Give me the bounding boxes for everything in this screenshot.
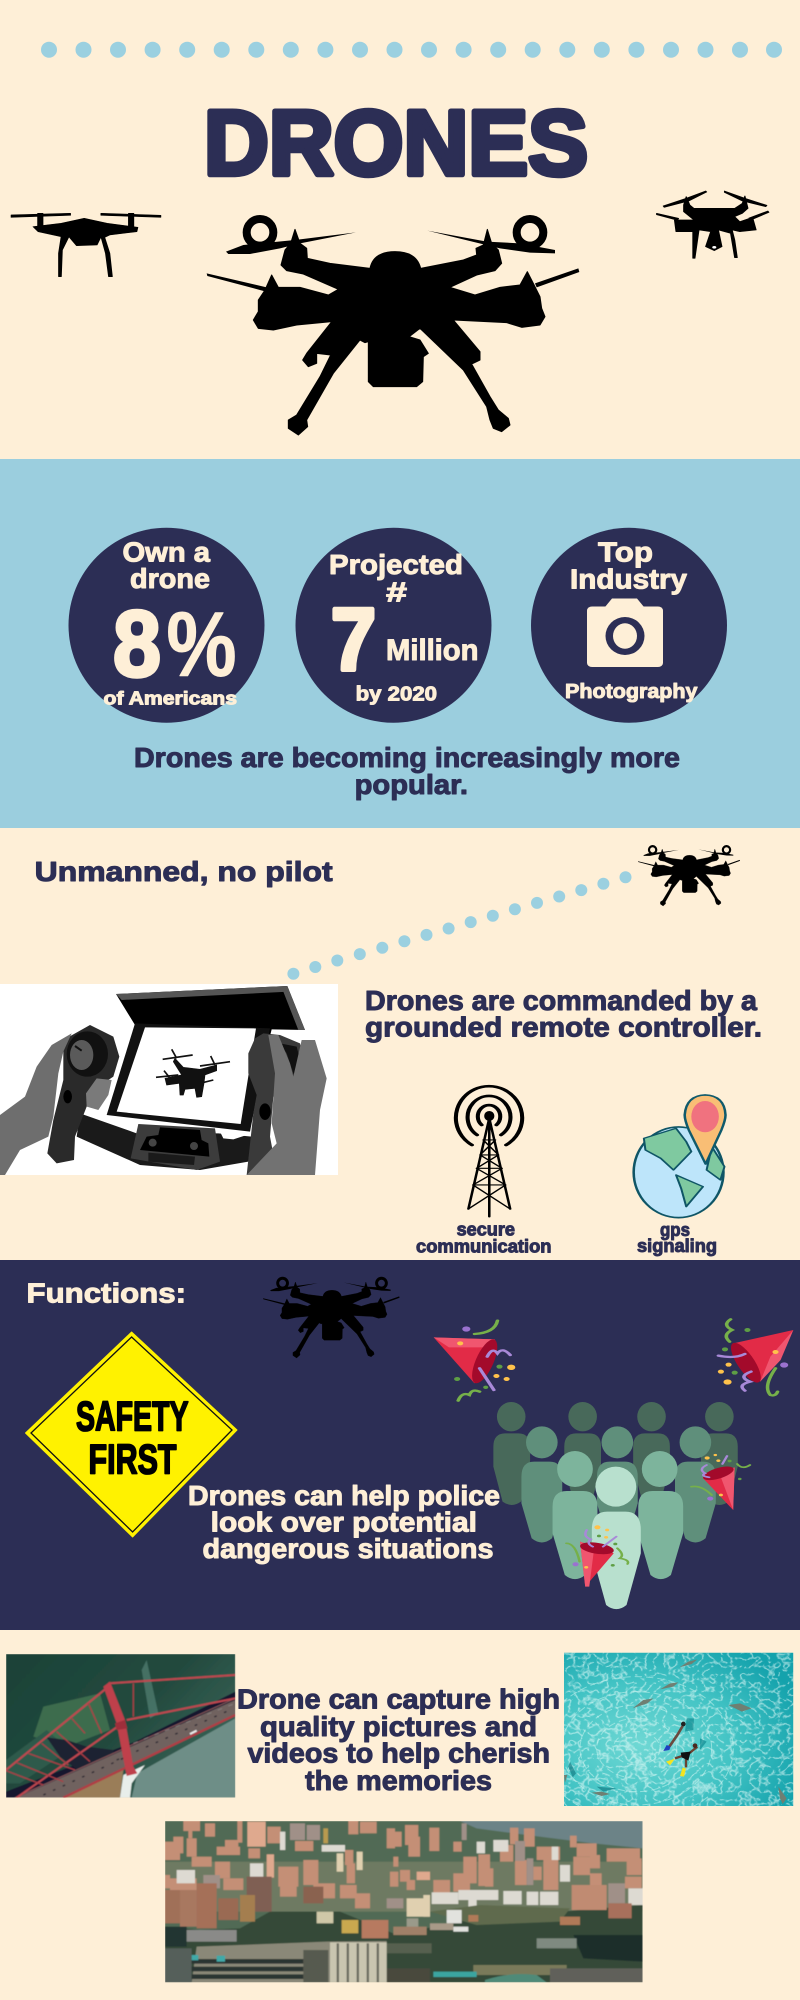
panel: functions (0, 1260, 800, 1630)
stat circle: top industry photography: Photography (565, 681, 698, 703)
stat circle: projected 7 million by 2020: by 2020 (356, 684, 437, 706)
panel: statistics (0, 459, 800, 828)
stat circle: projected 7 million by 2020: 7 (331, 590, 376, 689)
text: capture memories: the memories (305, 1765, 492, 1796)
stat circle: projected 7 million by 2020: # (386, 577, 408, 608)
icon: safety first sign: FIRST (88, 1436, 177, 1482)
stat circle: projected 7 million by 2020: Million (386, 634, 478, 667)
icon: party popper top right (718, 1319, 793, 1395)
text: commanded by remote controller: grounded remote controller. (365, 1012, 762, 1043)
label: gps signaling: gps (660, 1219, 690, 1240)
label: gps signaling: signaling (637, 1235, 717, 1256)
text: police situations: dangerous situations (202, 1533, 494, 1564)
text: police situations: Drones can help police (188, 1480, 500, 1511)
heading: functions: Functions: (26, 1278, 186, 1309)
stat circle: top industry photography: Industry (570, 563, 687, 594)
caption: drones popularity: popular. (355, 769, 468, 800)
icon: safety first sign (26, 1332, 237, 1537)
icon: crowd of people (493, 1402, 738, 1609)
icon: radio tower (456, 1086, 522, 1217)
icon: globe with gps pin (634, 1095, 726, 1218)
icon: party popper top left (434, 1321, 515, 1401)
text: capture memories (237, 1683, 560, 1796)
text: capture memories: Drone can capture high (237, 1683, 560, 1714)
photo: city skyline (165, 1821, 643, 1982)
icon: small drone right (657, 191, 769, 258)
stat circle: top industry photography (531, 528, 727, 723)
text: commanded by remote controller: Drones are commanded by a (365, 985, 757, 1016)
icon: camera (587, 598, 663, 667)
label: secure communication: communication (416, 1236, 552, 1257)
stat circle: 8 percent own a drone: drone (130, 563, 210, 594)
stat circle: projected 7 million by 2020: Projected (329, 549, 463, 580)
label: secure communication (416, 1219, 552, 1257)
icon: small drone left (11, 213, 161, 277)
image: remote controller with hands (0, 984, 338, 1175)
label: gps signaling (637, 1219, 717, 1256)
arrow: dotted signal line (287, 871, 632, 980)
stat circle: projected 7 million by 2020 (296, 528, 492, 723)
caption: drones popularity (134, 742, 680, 800)
dotted line: top decoration (41, 42, 782, 58)
stat circle: top industry photography: Top (598, 537, 653, 568)
title: DRONES (204, 92, 588, 194)
stat circle: 8 percent own a drone: Own a (122, 537, 211, 568)
icon: safety first sign: SAFETY (76, 1392, 188, 1440)
text: commanded by remote controller (365, 985, 762, 1043)
icon: party popper centre (566, 1525, 628, 1587)
text: police situations: look over potential (211, 1507, 477, 1538)
photo: swimmers and sharks in turquoise sea (564, 1652, 794, 1806)
stat circle: 8 percent own a drone (68, 528, 264, 723)
stat circle: 8 percent own a drone: 8 (113, 591, 161, 696)
icon: large drone (207, 219, 579, 435)
text: capture memories: videos to help cherish (248, 1738, 550, 1769)
text: police situations (188, 1480, 500, 1564)
icon: flying drone (638, 846, 740, 906)
stat circle: 8 percent own a drone: % (166, 594, 236, 696)
text: capture memories: quality pictures and (260, 1711, 537, 1742)
icon: police drone (263, 1278, 400, 1358)
stat circle: 8 percent own a drone: of Americans (104, 687, 237, 708)
caption: drones popularity: Drones are becoming increasingly more (134, 742, 680, 773)
icon: party popper right (691, 1454, 750, 1510)
icon: drone on screen (156, 1049, 230, 1097)
label: secure communication: secure (457, 1219, 515, 1240)
heading: unmanned, no pilot: Unmanned, no pilot (35, 856, 333, 887)
photo: golden gate bridge aerial (6, 1654, 235, 1798)
